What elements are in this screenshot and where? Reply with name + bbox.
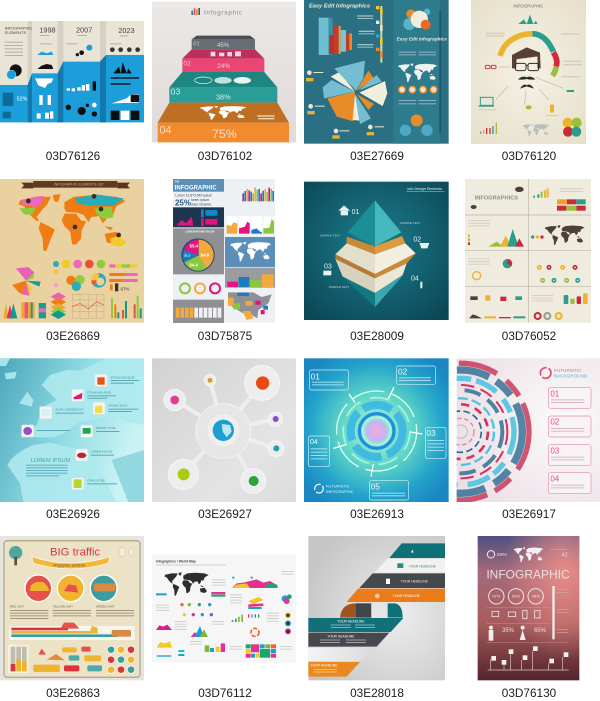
ribbon 4 orange: YOUR HEADLINE [393,594,421,598]
map [18,194,127,251]
sample text: SAMPLE TEXT [400,221,421,225]
thumbnail: 03E26917 futuristic pink [456,358,600,502]
thumbnail: 03D76130 blurred gradient infographic: 67% [492,594,501,599]
box numbers: 05 [371,481,380,491]
world map [398,63,437,82]
concentric rings [337,391,417,471]
box numbers: 03 [426,428,436,438]
box text lines [311,377,444,496]
pictogram rows [557,199,586,211]
tree [9,546,22,565]
dotted grids [21,302,46,318]
box numbers: 02 [550,418,560,427]
moustaches [518,77,535,80]
heading: INFOGRAPHICS [475,196,518,202]
small bars [232,614,259,622]
dark panel [173,207,224,227]
thumbnail: 03E26927 hub and spoke [152,358,296,502]
label: 03E26913: 03E26913 [350,507,404,521]
year headings [5,25,135,35]
card labels: ETIAM MOLIQUE [111,375,134,379]
step 2 pink [182,49,264,72]
sample text: SAMPLE TEXT [329,285,349,289]
label: 03E26926: 03E26926 [46,507,100,521]
number labels: 01 [352,209,360,216]
box numbers: 01 [311,371,320,381]
heading block: THE [175,181,180,183]
heading: Info Design Elements [407,187,442,191]
logo and heading: FUTURISTIC [326,484,350,489]
thumbnail: 03D76130 blurred gradient infographic: 60% [512,594,520,599]
step 3 teal: 38% [216,92,231,101]
label: 03E28018: 03E28018 [350,686,404,700]
tall bars [564,293,588,304]
ring chart [251,628,259,636]
white cards with icons [22,374,107,490]
left area charts [156,625,184,657]
map panel [225,237,275,267]
number labels: 02 [413,237,421,244]
text lines [5,35,128,56]
ribbon 5 teal [308,618,403,632]
card labels: ETIAM MOLIQUE [87,390,111,394]
ring icons [399,86,437,93]
dots timelines [180,603,213,616]
thumbnail: 03E26863 big traffic [0,536,144,680]
heading: BIG traffic [50,546,100,558]
intro text: 25% [175,198,191,207]
top pyramid [348,200,401,246]
heading: INFOGRAPHIC [513,3,543,8]
dark world map [164,572,209,596]
label: 03D76126: 03D76126 [46,149,101,163]
ribbon 5 teal: YOUR HEADLINE [337,620,365,624]
heading: Infographic [204,10,243,17]
logo and heading: FUTURISTIC [554,368,582,373]
step 1 grey: 01 [193,41,200,47]
dark world map [545,225,585,245]
bubble cluster [282,594,292,604]
thumbnail: 03D76120 hipster face [471,0,586,144]
sample text [320,221,421,289]
ribbon 3 dark: YOUR HEADLINE [401,580,429,584]
box numbers: 01 [550,389,560,398]
button grid [107,646,135,673]
intro text: dolor sit amet. [191,202,212,206]
bottom bar chart [480,123,497,134]
road bars [9,623,135,640]
percent rings [489,589,543,604]
info boxes [548,387,591,494]
arc gauge [500,34,557,76]
four area charts [227,216,274,234]
centre triangles [191,626,208,637]
sample text: SAMPLE TEXT [320,233,341,237]
box numbers: 03 [550,446,560,455]
bubbles [403,9,431,30]
exploded pie [12,267,41,296]
label: 03D76112: 03D76112 [198,686,252,700]
thumbnail: 03E26913 futuristic blue [304,358,449,502]
middle layers [335,236,416,293]
world map [514,547,543,562]
number stat: 42 [561,553,568,559]
ribbon 1 teal: ▲ [410,549,415,554]
column headings [10,605,115,609]
people panel [173,300,224,323]
bar chart [111,296,142,318]
logo and heading [540,368,588,379]
grey panel with pie chart: LOREM IPSUM DOLOR [185,229,214,233]
label: 03E26917: 03E26917 [502,507,556,521]
circles and small charts [10,64,22,76]
label: 03D75875: 03D75875 [198,329,253,343]
USA map [228,292,272,320]
thumbnail: 03D76102 staircase [152,2,296,142]
ribbon 3 dark [359,573,445,588]
thumbnail: 03D76052 eight panels [465,179,591,323]
text lines [479,33,582,116]
top bar chart [225,179,275,207]
bottom map [522,124,549,136]
grey panel with pie chart: $4.4 [189,262,198,267]
coloured blocks on grey panel [225,268,275,288]
timeline [357,6,383,63]
step 4 orange: 75% [212,127,237,141]
intro text: lorem ipsum [191,198,209,202]
step 1 grey [192,36,255,49]
ribbon 6 dark: YOUR HEADLINE [327,634,355,638]
arrows [333,387,422,477]
thumbnail: 03E28009 pyramid [304,182,449,320]
info boxes [309,366,446,500]
label: 03D76102: 03D76102 [198,149,252,163]
label: 03E26927: 03E26927 [198,507,252,521]
second heading: Easy Edit Infographics [397,36,447,41]
bottom donuts [535,313,562,319]
node icons [170,376,279,486]
thumbnail: 03D76126 blue and beige timeline [0,21,144,122]
column headings: GREEN UNIT [96,605,115,609]
banner [21,181,130,188]
square tile grid [246,644,276,658]
card labels: LOREM AUGUE [91,449,113,453]
thumbnail: 03D76130 blurred gradient infographic: 45% [532,594,540,599]
cloud icons [471,187,524,209]
step 3 teal [169,72,277,103]
globes [400,114,433,136]
ribbon 8 orange [308,662,360,677]
connectors and icons [496,67,563,105]
venn circles [66,275,85,291]
year headings: 1998 [39,26,56,35]
grey panel with pie chart [173,228,224,274]
label: 03E27669: 03E27669 [350,149,404,163]
ribbon 8 orange: YOUR HEADLINE [310,663,338,667]
body text lines [156,571,294,650]
car icons [30,582,115,593]
label: 03E26869: 03E26869 [46,329,100,343]
hair and face [512,47,541,68]
land shapes [0,358,144,502]
grey panel with pie chart: $1.3 [184,253,190,257]
heading: Infographics / World Map [156,560,196,564]
banner: INFOGRAPHIC ELEMENTS LIST [54,183,104,187]
bottom bars [205,643,225,652]
device icons [492,611,540,619]
thumbnail: 03D76130 blurred gradient infographic [478,536,579,680]
concentric arcs [456,360,532,502]
number labels [324,209,421,282]
percentages: 65% [534,628,547,634]
step 2 pink: 02 [183,60,191,67]
exploded pie chart [323,61,387,124]
number labels: 03 [324,263,332,270]
triangle chart [3,303,17,318]
people sticker [119,547,134,557]
outer nodes [164,366,284,493]
three car circles [25,575,117,602]
core [365,420,388,442]
text lines [468,188,583,301]
header stat: 63% [497,552,508,558]
ribbon 4 orange [347,589,445,602]
bar chart panel [533,188,549,198]
gauge panel [8,645,29,673]
area chart row [469,314,525,318]
column headings: RED UNIT [10,605,24,609]
label: 03D76120: 03D76120 [502,149,557,163]
spokes [175,381,276,481]
car stickers [33,647,102,672]
mini mountain chart [518,15,537,24]
year headings: INFOGRAPHIC [5,25,32,30]
thumbnail: 03E26926 map with cards [0,358,144,502]
center globe node [196,404,251,458]
box numbers [310,367,436,491]
thumbnail: 03D76112 world map elements [152,554,296,663]
card labels [55,375,134,482]
ring chart [91,273,106,288]
stacked layers [248,597,263,609]
grey panel with pie chart: $4.9 [201,253,210,258]
card labels: CRAS VITAE [87,478,105,482]
box numbers: 04 [550,474,560,483]
label: 03E26863: 03E26863 [46,686,100,700]
thumbnail: 03E28018 ribbons [308,536,445,680]
timeline circles [538,266,579,282]
map pins [26,194,121,237]
heading: INFOGRAPHIC [486,568,570,582]
heading block: INFOGRAPHIC [175,186,217,192]
3D bar chart [319,18,352,55]
people bars: 67% [121,287,129,292]
step 1 grey: 45% [217,43,230,49]
column headings: YELLOW UNIT [53,605,73,609]
body text [26,465,68,476]
ribbon [32,557,110,569]
card labels: MAGNA QUIS [108,404,127,408]
step 2 pink: 24% [217,63,230,70]
step 3 teal: 03 [171,87,180,97]
percentages [502,628,547,634]
bottom tip [343,275,403,307]
step 4 orange [158,103,289,142]
icon row [470,295,522,301]
pie side labels [307,70,384,133]
column text [10,610,134,619]
top mountain strip [232,577,277,588]
label: 03D76052: 03D76052 [502,329,556,343]
pin icon [487,551,495,558]
logo and heading: INFOGRAPHIC [326,489,354,494]
year headings: 2023 [118,26,135,35]
ribbon 2 white: YOUR HEADLINE [409,565,437,569]
year headings: 2007 [76,26,92,35]
thumbnail: 03E26869 vintage world map [0,179,144,323]
thumbnail: 03D76126 blue and beige timeline: 52% [17,97,28,103]
number labels: 04 [411,275,419,282]
percentages: 35% [502,628,515,634]
box numbers [550,389,560,483]
box text lines [551,399,584,488]
people bars [109,264,138,292]
ribbon: Infographics elements [53,563,86,567]
icon: bar chart logo [191,8,200,15]
heading: Easy Edit Infographics [309,4,370,10]
heading block [173,179,224,192]
intro text: Lorem 12,873,549 ipsum [175,193,212,197]
grey panel with pie chart: $5.4 [190,244,199,249]
label: 03E28009: 03E28009 [350,329,404,343]
stacked diamonds [51,292,66,319]
quad circles [563,118,582,137]
box numbers: 02 [398,367,408,377]
box numbers: 04 [310,439,318,446]
pie and ring [473,259,512,280]
fold [340,603,403,618]
donut rings [180,283,220,293]
pins [531,235,544,239]
intro text [175,193,212,207]
glasses [515,63,539,71]
icons [323,205,429,288]
logo and heading: BACKGROUND [554,374,588,379]
small strip legends [156,592,225,597]
ribbon 1 teal [389,543,445,558]
ribbon 7 white [308,647,375,661]
line grid chart [72,294,104,318]
ribbon 6 dark [308,633,389,647]
vertical scale [552,586,555,639]
step 4 orange: 04 [159,124,172,136]
thumbnail: 03D75875 colourful dashboard [173,179,275,323]
dividers and text [486,549,568,643]
people figures [489,626,526,641]
year headings: ELEMENTS [5,30,26,35]
thumbnail: 03E27669 teal pie [304,0,449,144]
heading: LOREM IPSUM [31,458,71,464]
chart stems and flags [488,651,569,670]
right donuts [286,613,290,634]
mountain chart [468,229,524,247]
ribbon 2 white [375,559,445,573]
card labels: ALIAC CONSEQUAT [55,408,84,412]
card labels: INCIPIT TITLE [96,426,115,430]
label: 03D76130: 03D76130 [502,686,557,700]
circle icons [53,260,105,287]
logo and heading [315,484,354,494]
